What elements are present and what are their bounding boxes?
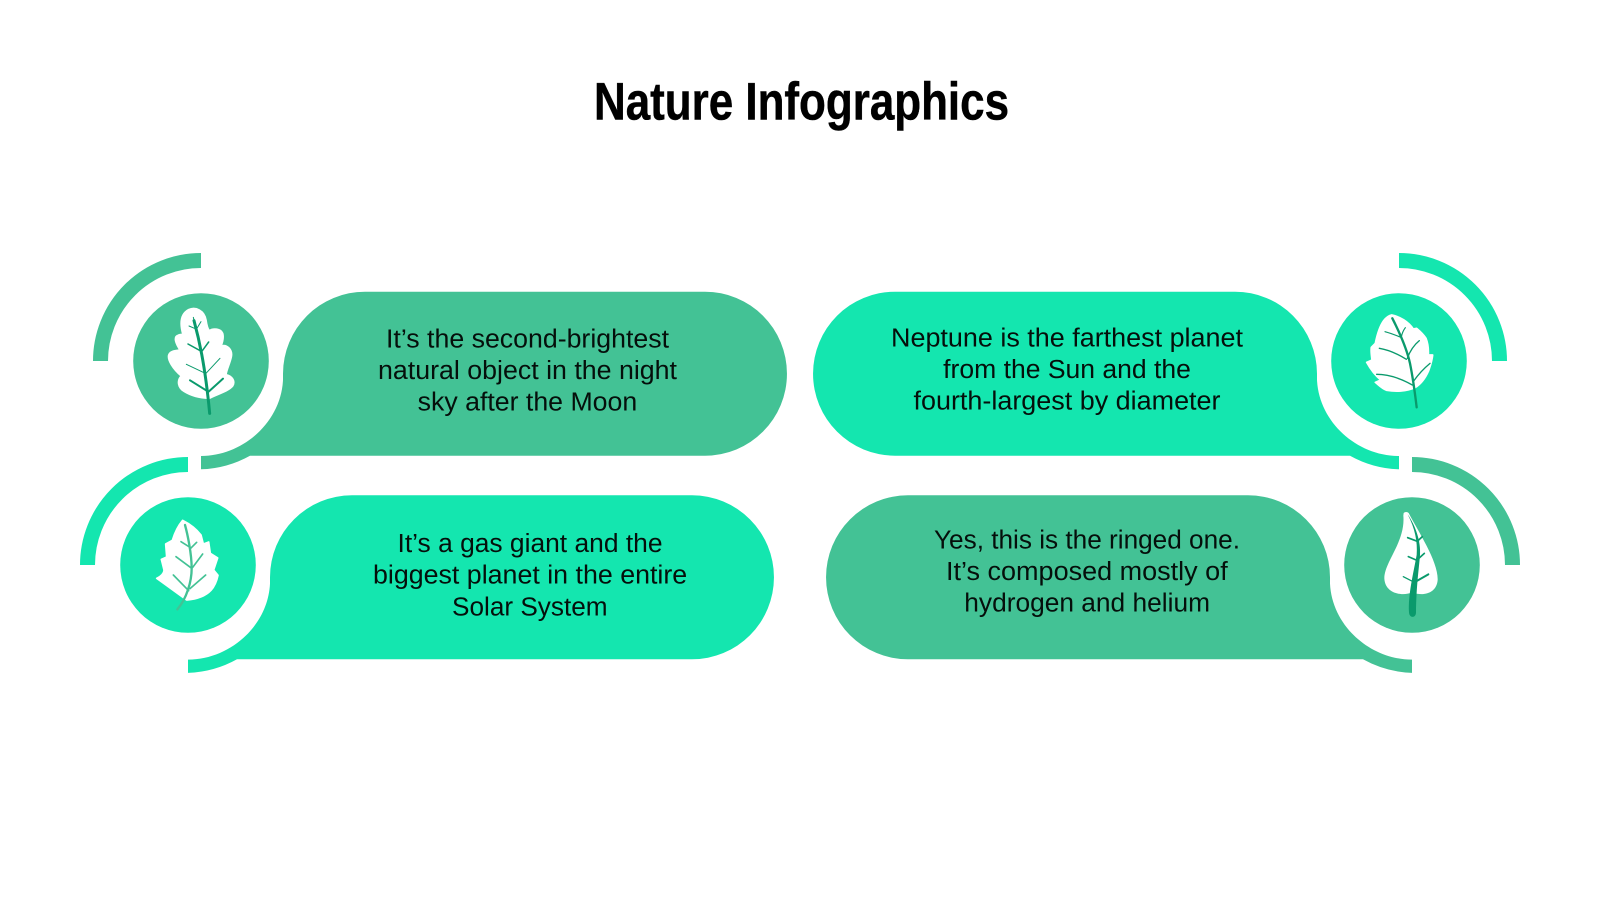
text block bottom-left: biggest planet in the entire	[373, 560, 687, 590]
panel: bottom-right card	[826, 464, 1512, 673]
text block top-right	[891, 322, 1244, 416]
text block bottom-left: It’s a gas giant and the	[398, 528, 662, 558]
title: Nature Infographics	[594, 72, 1009, 132]
icon circle bottom-left	[120, 497, 256, 633]
text block bottom-right: Yes, this is the ringed one.	[934, 524, 1240, 554]
outer arc top-right	[1399, 260, 1500, 361]
text block top-right: fourth-largest by diameter	[914, 386, 1221, 416]
speech bubble top-left	[201, 292, 787, 469]
text block top-left: natural object in the night	[378, 355, 678, 385]
icon: serrated leaf	[1367, 315, 1433, 407]
outer arc bottom-right	[1412, 464, 1512, 565]
icon circle top-right	[1331, 293, 1467, 429]
panel: top-right card	[813, 260, 1500, 469]
text block top-right: from the Sun and the	[943, 354, 1191, 384]
text block bottom-right: hydrogen and helium	[964, 588, 1210, 618]
panel: top-left card	[100, 260, 787, 469]
leaf stem	[1408, 514, 1420, 617]
text block bottom-right: It’s composed mostly of	[946, 556, 1228, 586]
text block bottom-left	[373, 528, 687, 621]
icon circle top-left	[133, 293, 269, 429]
text block bottom-left: Solar System	[452, 591, 608, 621]
text block bottom-right	[934, 524, 1240, 618]
outer arc top-left	[100, 260, 201, 361]
icon: maple-like leaf	[157, 520, 218, 609]
speech bubble top-right	[813, 292, 1399, 469]
outer arc bottom-left	[88, 464, 188, 565]
icon: oak leaf	[169, 309, 234, 413]
text block top-right: Neptune is the farthest planet	[891, 322, 1244, 352]
text block top-left	[378, 323, 678, 417]
panel: bottom-left card	[88, 464, 774, 673]
text block top-left: It’s the second-brightest	[386, 323, 670, 353]
icon circle bottom-right	[1344, 497, 1480, 633]
text block top-left: sky after the Moon	[418, 387, 637, 417]
icon: heart-shaped leaf	[1384, 512, 1438, 617]
speech bubble bottom-left	[188, 495, 774, 673]
speech bubble bottom-right	[826, 495, 1412, 673]
